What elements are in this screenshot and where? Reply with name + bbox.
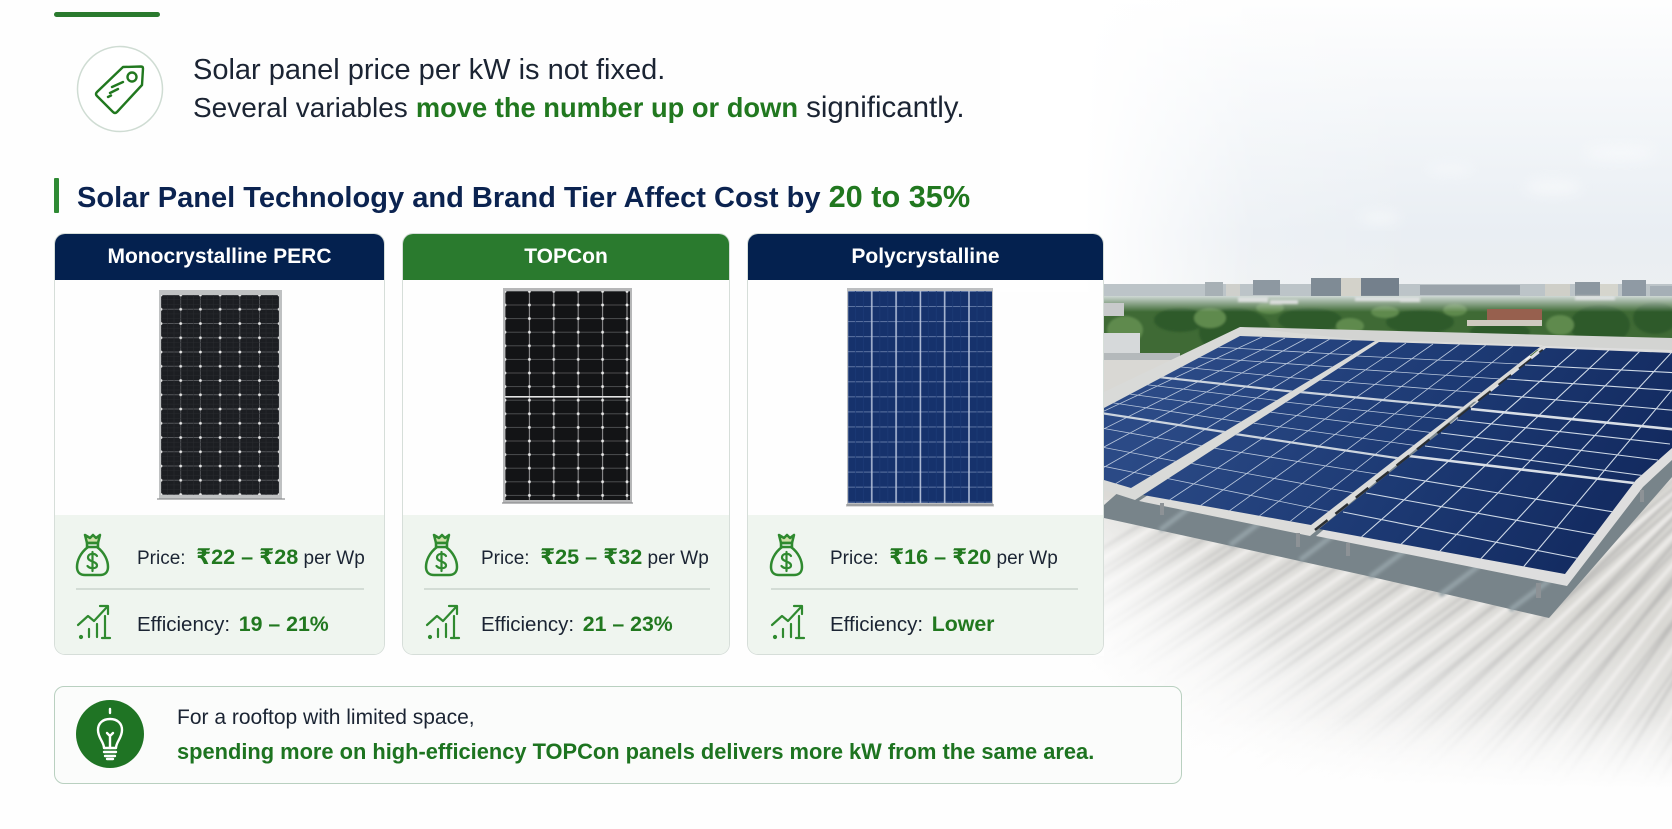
icon: money bag, card 3 bbox=[771, 535, 802, 575]
icon: light bulb bbox=[76, 700, 144, 768]
icon: money bag, card 2 bbox=[426, 535, 457, 575]
sky bbox=[1000, 0, 1672, 292]
solar panel image: polycrystalline bbox=[846, 288, 994, 506]
heading: Solar Panel Technology and Brand Tier Affect Cost by 20 to 35% bbox=[77, 179, 970, 214]
city skyline bbox=[1104, 278, 1672, 298]
efficiency, card 2: Efficiency: 21 – 23% bbox=[481, 612, 673, 636]
rooftop solar photo scene bbox=[157, 86, 1672, 768]
solar panel image: TOPCon bbox=[502, 288, 633, 504]
callout text bbox=[177, 706, 1094, 764]
icon: price tag bbox=[76, 46, 164, 132]
efficiency, card 1: Efficiency: 19 – 21% bbox=[137, 612, 329, 636]
efficiency, card 3: Efficiency: Lower bbox=[830, 612, 994, 636]
card: Polycrystalline: Polycrystalline bbox=[851, 245, 1000, 268]
card: TOPCon: TOPCon bbox=[524, 245, 608, 268]
panel B bbox=[1135, 335, 1545, 530]
array frames bbox=[1104, 327, 1672, 586]
intro text: Solar panel price per kW is not fixed. bbox=[193, 54, 665, 86]
card: Monocrystalline PERC: Monocrystalline PERC bbox=[107, 245, 332, 268]
corrugated roof bbox=[1104, 360, 1672, 768]
icon: efficiency chart, card 3 bbox=[772, 606, 804, 638]
solar array bbox=[1104, 327, 1672, 598]
intro text bbox=[193, 54, 965, 124]
trees bbox=[1104, 296, 1672, 356]
top accent bar bbox=[54, 12, 160, 17]
panel C bbox=[1310, 340, 1672, 580]
card: TOPCon bbox=[402, 233, 730, 655]
icon: money bag, card 1 bbox=[77, 535, 108, 575]
callout text: For a rooftop with limited space, bbox=[177, 706, 475, 729]
price, card 2: Price: ₹25 – ₹32 per Wp bbox=[481, 544, 709, 568]
callout bbox=[54, 686, 1182, 784]
intro text: Several variables move the number up or down significantly. bbox=[193, 91, 965, 124]
mounting legs bbox=[1160, 490, 1644, 598]
solar panel image: monocrystalline bbox=[157, 290, 285, 500]
panel A bbox=[1104, 336, 1375, 488]
price, card 1: Price: ₹22 – ₹28 per Wp bbox=[137, 544, 365, 568]
icon: efficiency chart, card 2 bbox=[427, 606, 459, 638]
card: Monocrystalline PERC bbox=[54, 233, 385, 655]
icon: efficiency chart, card 1 bbox=[78, 606, 110, 638]
price, card 3: Price: ₹16 – ₹20 per Wp bbox=[830, 544, 1058, 568]
callout text: spending more on high-efficiency TOPCon panels delivers more kW from the same area. bbox=[177, 739, 1094, 764]
panel shadow on roof bbox=[1104, 400, 1672, 618]
parapet wall bbox=[1104, 333, 1180, 395]
card: Polycrystalline bbox=[747, 233, 1104, 655]
